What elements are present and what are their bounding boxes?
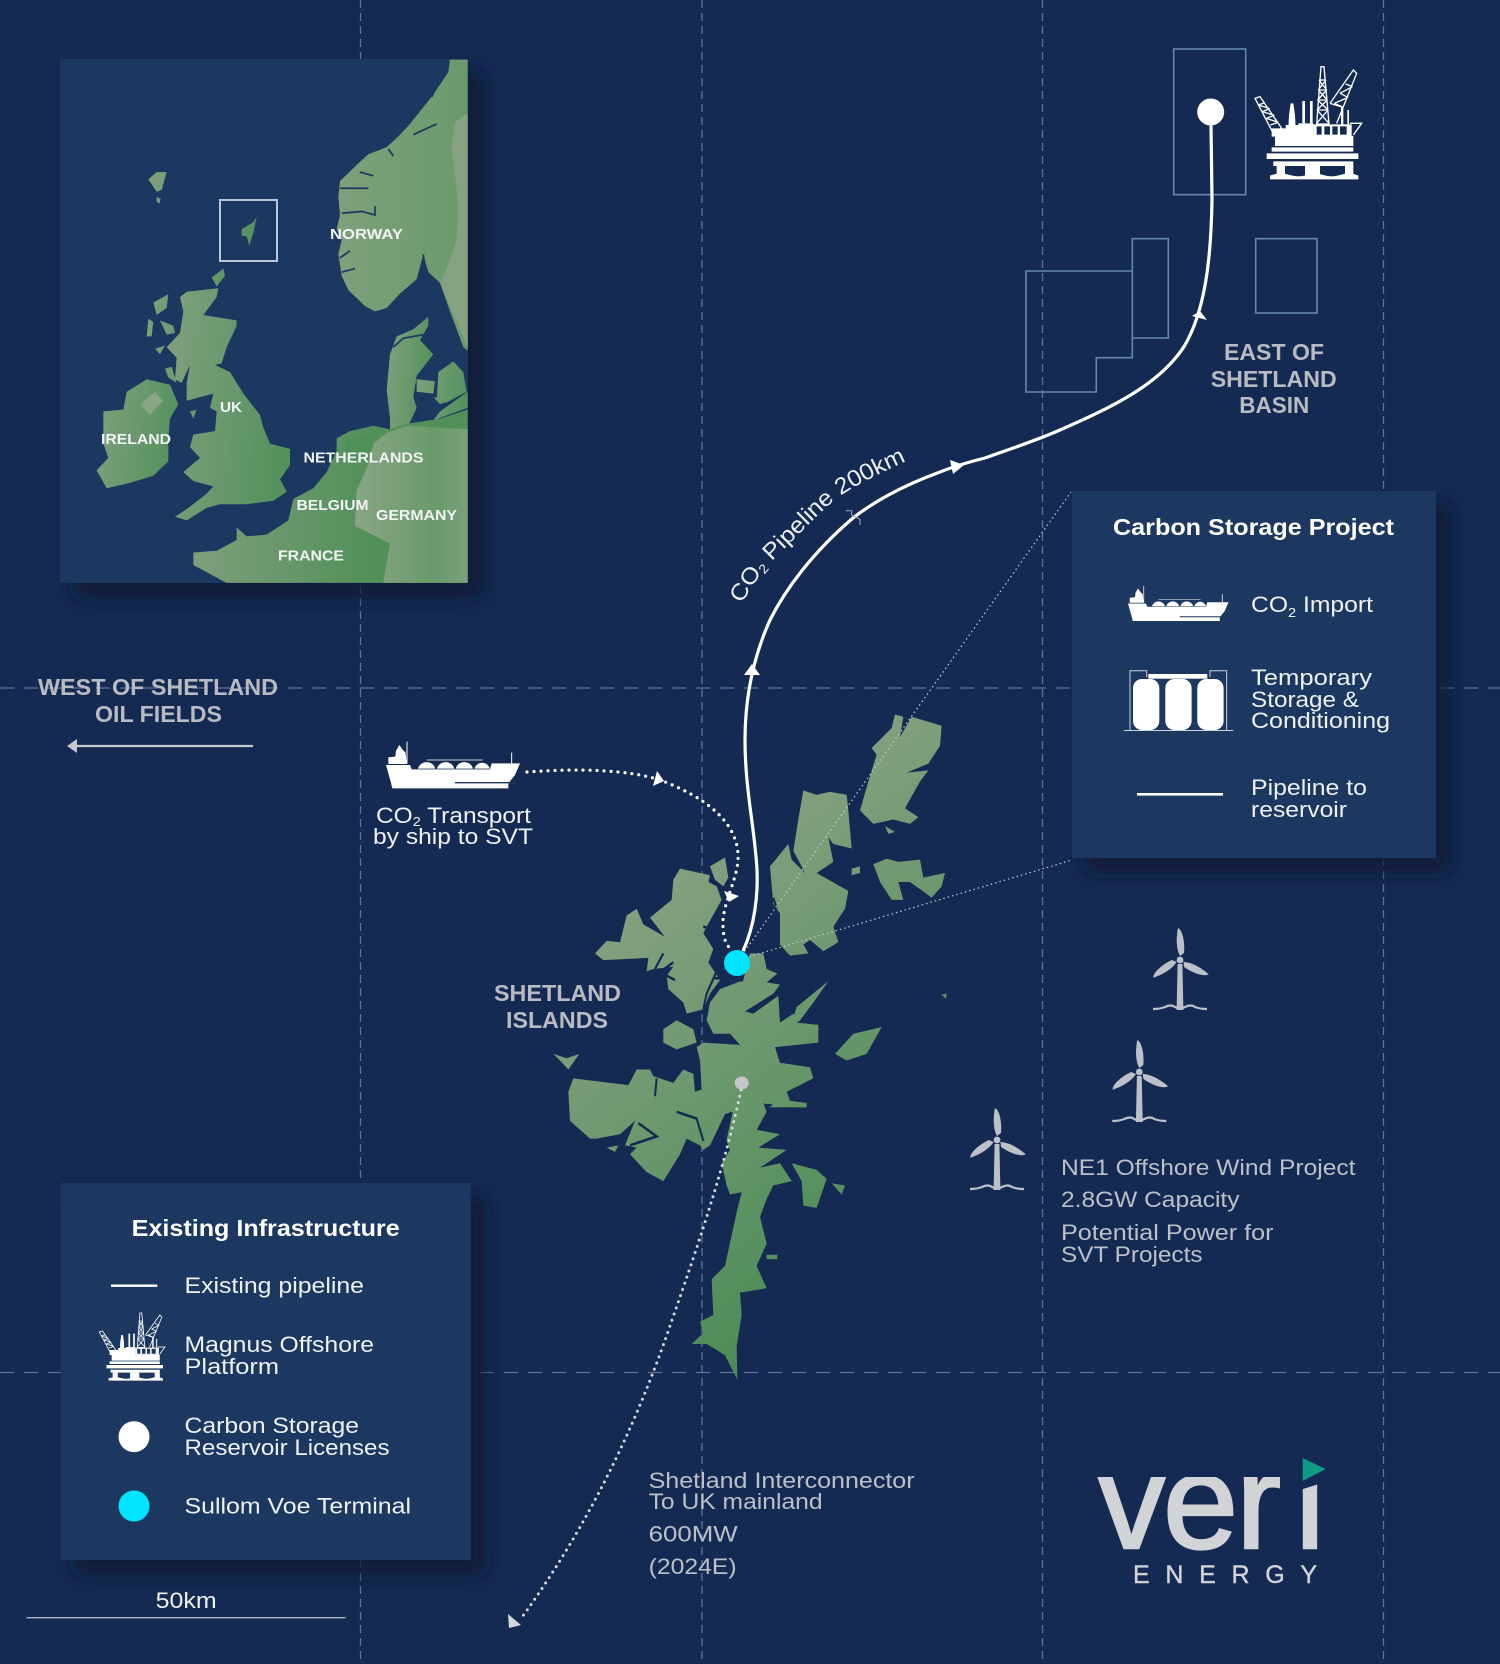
NE1 wind project label: 2.8GW Capacity (1061, 1187, 1240, 1212)
pipeline to reservoir label: Pipeline to (1251, 775, 1367, 800)
Magnus platform label: Platform (184, 1354, 279, 1379)
temporary storage label: Conditioning (1251, 708, 1390, 733)
icon: Magnus platform (99, 1313, 165, 1381)
locator box around Shetland (220, 200, 277, 261)
inset map sea background (60, 59, 468, 583)
CO2 import label: 2 (1288, 605, 1296, 620)
pipeline to reservoir (743, 125, 1212, 951)
CO2 transport label: Transport (421, 803, 531, 828)
temporary storage label: Temporary (1251, 665, 1372, 690)
East of Shetland Basin heading: SHETLAND (1211, 366, 1337, 392)
icon: offshore platform (1255, 67, 1362, 179)
pipeline label: CO (731, 567, 758, 600)
pipeline to reservoir label: reservoir (1251, 797, 1347, 822)
map: Shetland Islands (553, 715, 947, 1380)
logo: Veri Energy: veri (1098, 1426, 1325, 1577)
CO2 import label: Import (1296, 592, 1373, 617)
icon: wind turbine 2 (1109, 1040, 1169, 1122)
temporary storage label (1251, 665, 1390, 733)
inset country labels: BELGIUM (296, 497, 368, 514)
icon: storage tanks (1124, 671, 1233, 730)
CO2 transport label: by ship to SVT (373, 824, 533, 849)
reservoir licences label: Reservoir Licenses (184, 1435, 390, 1460)
East of Shetland Basin heading (1211, 339, 1337, 418)
thin dotted connector lines to Carbon Storage panel (742, 492, 1072, 958)
interconnector label (649, 1468, 915, 1579)
pipeline to reservoir label (1251, 775, 1367, 822)
dotted route: CO2 shipping (527, 770, 739, 950)
interconnector dotted route (508, 1076, 749, 1628)
icon: wind turbine 1 (1150, 928, 1209, 1010)
CO2 import label: CO (1251, 592, 1284, 617)
Magnus platform label: Magnus Offshore (184, 1332, 374, 1357)
icon: reservoir licence marker (1197, 98, 1224, 126)
arrow: towards west of Shetland (67, 739, 253, 753)
panel heading: Carbon Storage Project (1113, 514, 1394, 540)
reservoir licences label: Carbon Storage (184, 1413, 359, 1438)
CO2 transport label: CO (376, 803, 409, 828)
inset country labels: IRELAND (101, 431, 171, 448)
Sullom Voe Terminal label: Sullom Voe Terminal (184, 1494, 411, 1518)
West of Shetland heading: WEST OF SHETLAND (38, 674, 278, 700)
scale bar: 50km (156, 1588, 217, 1613)
NE1 wind project label (1061, 1155, 1356, 1267)
icon: ship import (1128, 586, 1228, 621)
pipeline legend line (1137, 793, 1223, 796)
CO2 transport label (373, 803, 533, 849)
inset country labels: UK (220, 399, 242, 416)
Shetland Islands heading: ISLANDS (506, 1007, 608, 1033)
pipeline path guide for label (742, 457, 915, 604)
East of Shetland Basin heading: BASIN (1239, 392, 1309, 418)
pipeline label: 2 (759, 564, 769, 574)
pipeline label: Pipeline 200km (762, 452, 905, 560)
existing pipeline label: Existing pipeline (184, 1273, 364, 1298)
panel: Existing Infrastructure (61, 1183, 471, 1560)
icon: white reservoir circle (118, 1421, 150, 1452)
icon: cyan terminal circle (118, 1490, 150, 1522)
inset map land masses (97, 60, 468, 583)
logo: Veri Energy: ENERGY (1133, 1561, 1317, 1589)
interconnector label: (2024E) (649, 1554, 737, 1579)
NE1 wind project label: NE1 Offshore Wind Project (1061, 1155, 1356, 1180)
West of Shetland heading (38, 674, 278, 727)
CO2 transport label: 2 (413, 814, 421, 829)
panel: regional inset map (60, 59, 468, 583)
inset country labels: FRANCE (278, 548, 344, 564)
inset country labels (101, 226, 457, 564)
marker: Sullom Voe Terminal (724, 950, 750, 976)
inset country labels: NETHERLANDS (304, 450, 424, 466)
interconnector label: To UK mainland (649, 1489, 823, 1514)
licence blocks: East of Shetland Basin (1026, 49, 1317, 392)
panel heading: Existing Infrastructure (132, 1215, 400, 1241)
inset country labels: GERMANY (376, 507, 457, 524)
temporary storage label: Storage & (1251, 687, 1359, 712)
interconnector label: Shetland Interconnector (649, 1468, 915, 1493)
inset country labels: NORWAY (330, 226, 403, 243)
interconnector label: 600MW (649, 1522, 738, 1546)
West of Shetland heading: OIL FIELDS (95, 701, 222, 727)
icon: ship (386, 742, 520, 788)
East of Shetland Basin heading: EAST OF (1224, 339, 1324, 365)
Shetland Islands heading: SHETLAND (494, 980, 621, 1006)
existing pipeline legend line (111, 1284, 157, 1287)
NE1 wind project label: SVT Projects (1061, 1242, 1202, 1267)
Shetland Islands heading (494, 980, 621, 1033)
NE1 wind project label: Potential Power for (1061, 1220, 1274, 1245)
reservoir licences label (184, 1413, 390, 1460)
icon: wind turbine 3 (967, 1108, 1026, 1190)
panel: Carbon Storage Project (1072, 491, 1436, 858)
Magnus platform label (184, 1332, 374, 1379)
